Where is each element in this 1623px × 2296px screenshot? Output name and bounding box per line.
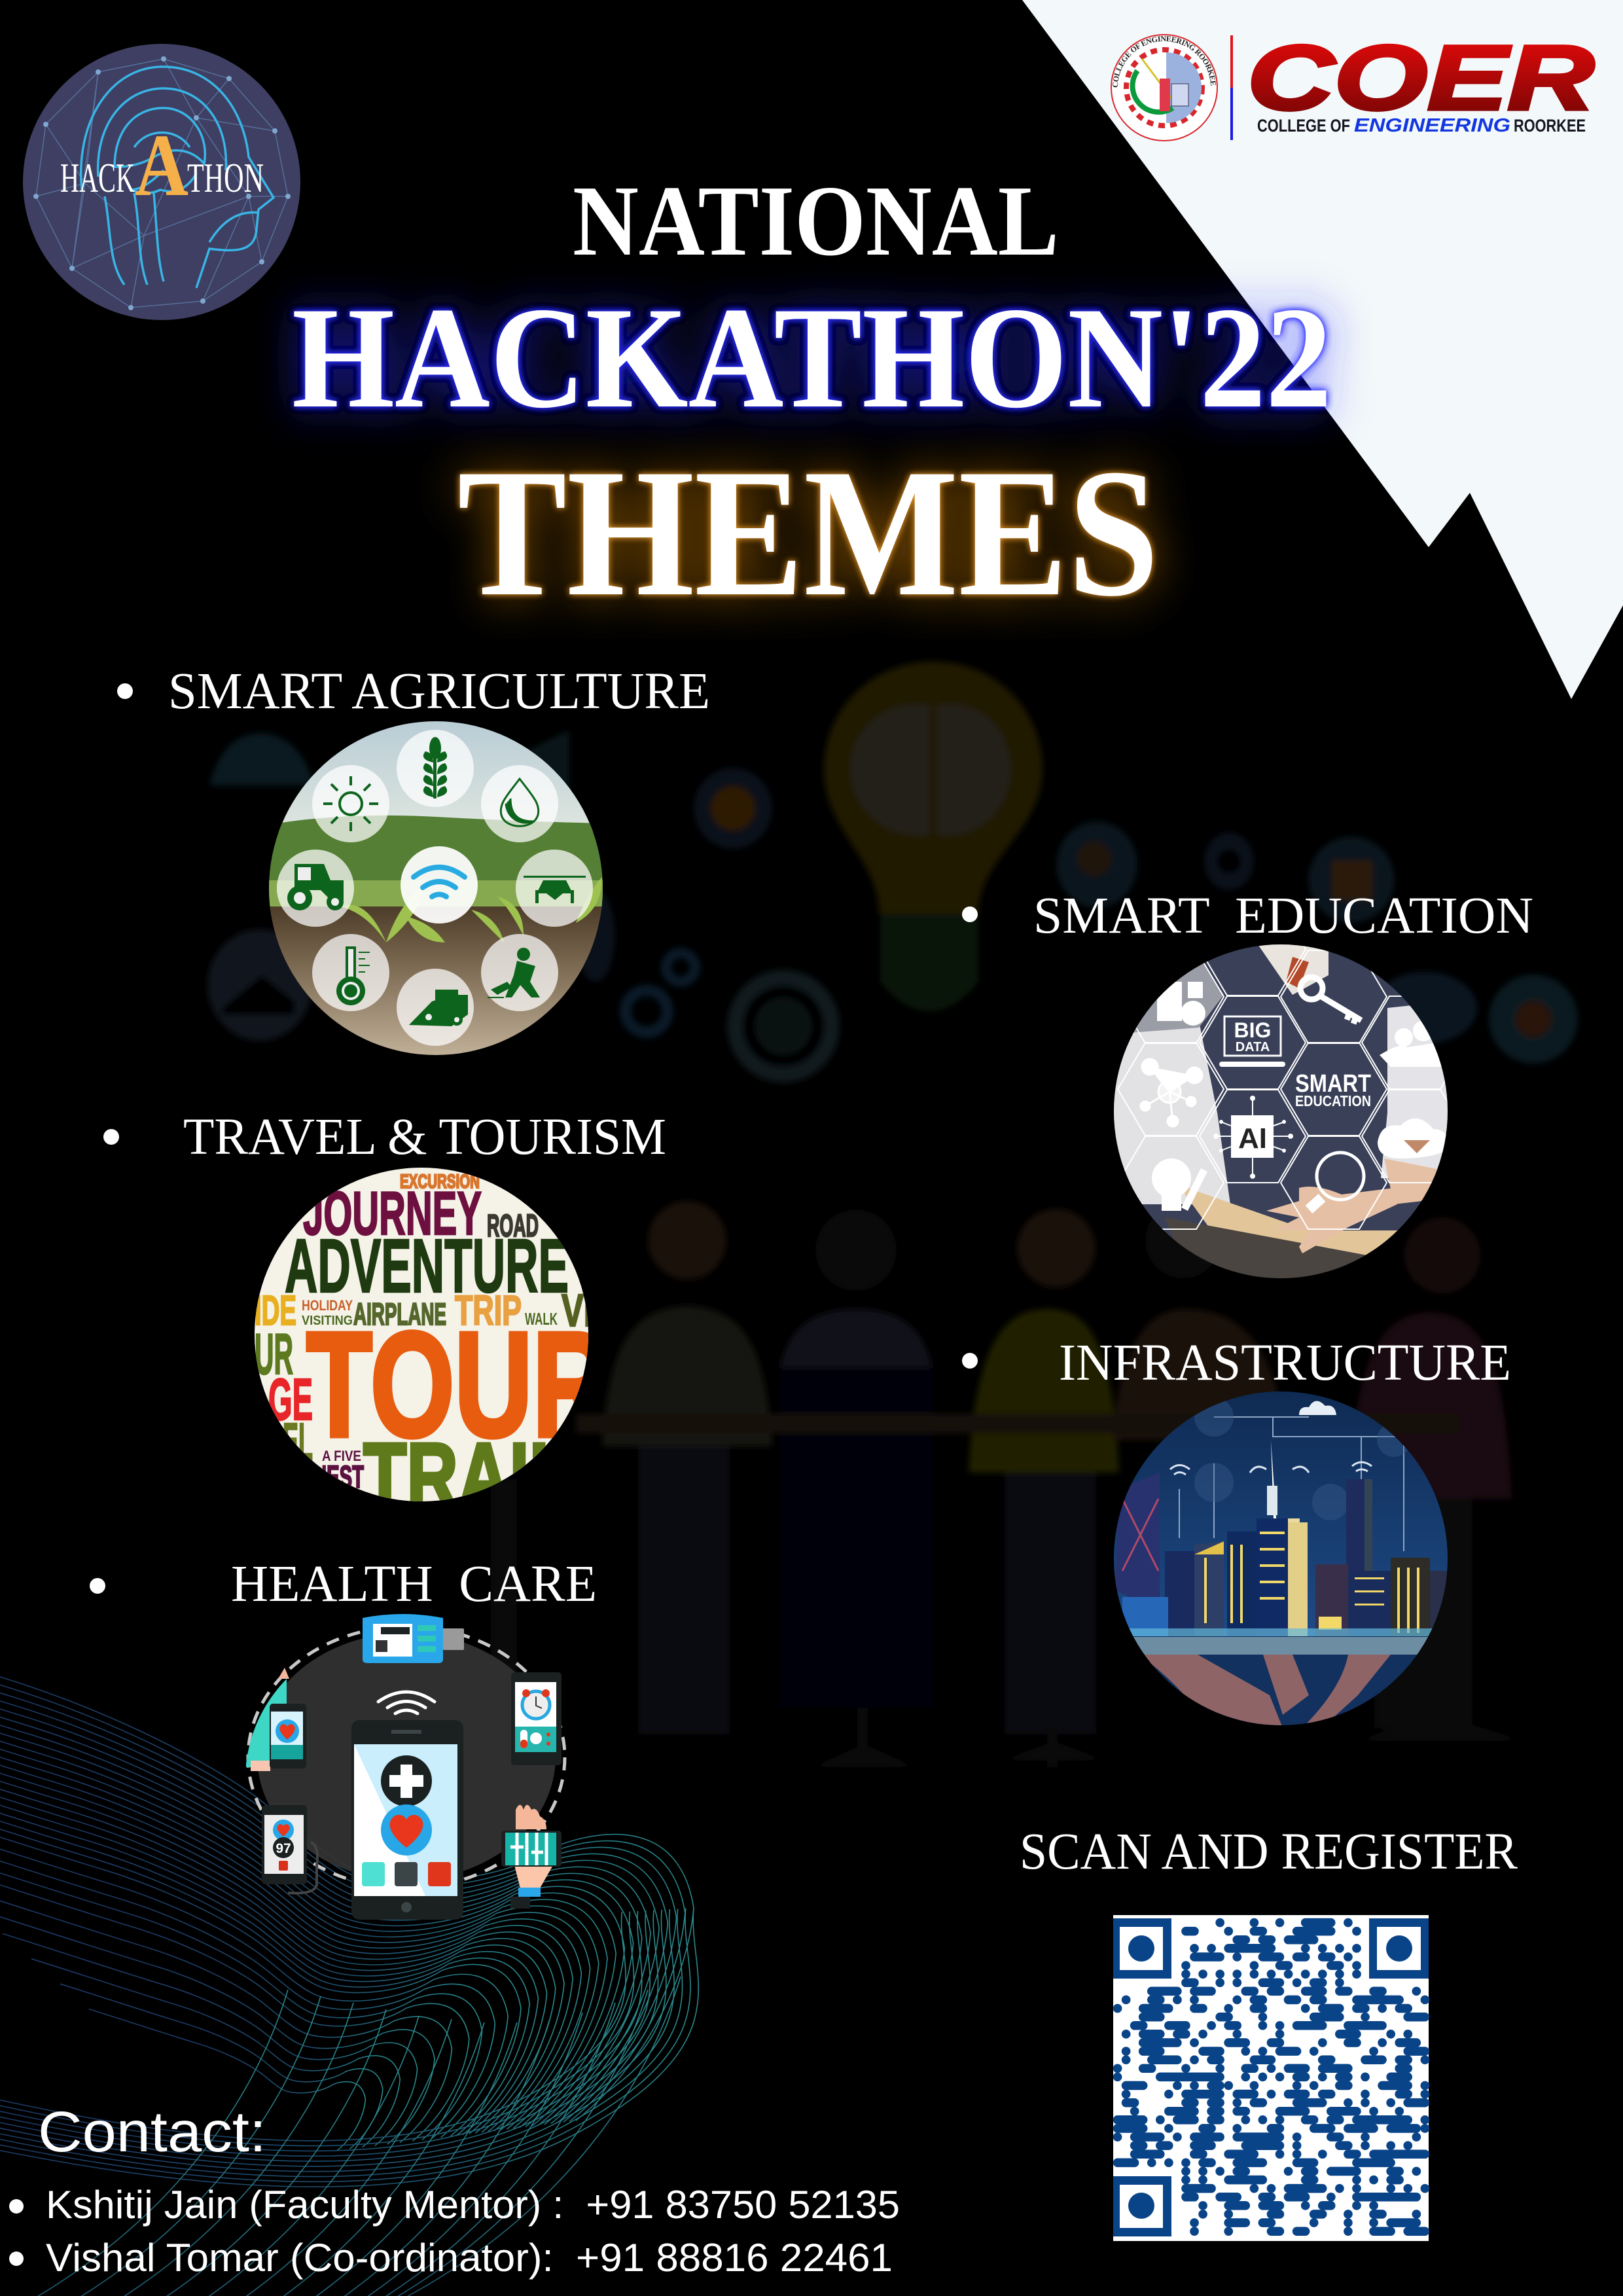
icon: hand with wrist sensor xyxy=(501,1805,562,1909)
logo text: A xyxy=(135,117,188,215)
panel: travel and tourism word cloud: TOUR xyxy=(306,1302,611,1468)
label: smart education xyxy=(1295,1070,1371,1109)
icon: big data laptop xyxy=(1219,1016,1285,1067)
logo text: HACK xyxy=(60,154,135,201)
panel: travel and tourism word cloud: HOLIDAY xyxy=(302,1297,353,1314)
icon: light bulb xyxy=(824,662,1043,1011)
COER subtitle xyxy=(1257,115,1586,136)
panel: travel and tourism word cloud xyxy=(249,1165,611,1529)
heading: smart education: SMART EDUCATION xyxy=(1033,888,1533,944)
panel: travel and tourism word cloud: UR xyxy=(255,1321,293,1386)
panel: travel and tourism word cloud: TRAIL xyxy=(363,1424,573,1529)
heading: infrastructure: INFRASTRUCTURE xyxy=(1059,1335,1511,1391)
icon: people xyxy=(1380,1020,1450,1067)
logo: hackathon brain circle xyxy=(23,44,300,320)
icon: network nodes xyxy=(1141,1059,1202,1126)
icon: head and brain xyxy=(81,67,274,288)
panel: travel and tourism word cloud: AIRPLANE xyxy=(353,1297,446,1331)
COER subtitle: ROORKEE xyxy=(1514,116,1586,135)
panel: travel and tourism word cloud: WALK xyxy=(525,1309,558,1329)
icon: wifi xyxy=(414,867,465,897)
icon: magnifier xyxy=(1309,1153,1364,1210)
title: NATIONAL: NATIONAL xyxy=(573,166,1059,277)
heading: scan and register: SCAN AND REGISTER xyxy=(1020,1823,1518,1880)
icon bubbles xyxy=(277,730,593,1046)
panel: travel and tourism word cloud: ROAD xyxy=(487,1209,539,1244)
hexagon grid xyxy=(1118,903,1468,1229)
icon: water drop xyxy=(501,779,539,826)
panel: smart agriculture image xyxy=(262,721,609,1057)
cloud icon xyxy=(1299,1401,1336,1415)
logo text: THON xyxy=(187,154,264,201)
panel: travel and tourism word cloud: IDE xyxy=(255,1287,296,1334)
label: smart education: EDUCATION xyxy=(1295,1092,1371,1109)
title: THEMES: THEMES xyxy=(457,431,1159,634)
icon: oximeter phone xyxy=(262,1805,317,1893)
icons: faded technology icons xyxy=(207,730,1578,1083)
panel: travel and tourism word cloud: EXCURSION xyxy=(400,1171,480,1193)
icon: alarm and pill phone xyxy=(511,1672,562,1765)
QR code xyxy=(1113,1915,1429,2241)
panel: travel and tourism word cloud: VI xyxy=(562,1285,593,1336)
heading: smart agriculture: SMART AGRICULTURE xyxy=(168,663,710,720)
heading: health care: HEALTH CARE xyxy=(231,1556,597,1613)
white torn corner shape xyxy=(1022,0,1623,699)
icon: big data laptop: BIG xyxy=(1234,1018,1271,1042)
contact: Vishal Tomar: Vishal Tomar (Co-ordinator): +91 88816 22461 xyxy=(46,2236,893,2280)
contact: Kshitij Jain: Kshitij Jain (Faculty Mentor) : +91 83750 52135 xyxy=(46,2183,900,2227)
icon: tractor xyxy=(287,864,344,910)
city lights xyxy=(1204,1532,1419,1633)
icon: wheat xyxy=(423,737,447,798)
panel: travel and tourism word cloud: EL xyxy=(283,1412,313,1471)
panel: travel and tourism word cloud: GE xyxy=(268,1367,313,1433)
icon: heart rate phone and building xyxy=(246,1668,306,1771)
icon: idea bulb and pencil xyxy=(1152,1158,1207,1211)
connection lines xyxy=(1179,1417,1407,1551)
QR data modules xyxy=(1118,1923,1425,2231)
panel: travel and tourism word cloud: JOURNEY xyxy=(303,1179,482,1247)
panel: travel and tourism word cloud: TRIP xyxy=(455,1287,522,1334)
panel: health care illustration xyxy=(246,1614,565,1920)
panel: travel and tourism word cloud: VISITING xyxy=(302,1314,353,1328)
panel: travel and tourism word cloud: NEST xyxy=(313,1460,364,1495)
emblem: COLLEGE OF ENGINEERING ROORKEE xyxy=(1113,36,1216,88)
icon: oximeter phone: 97 xyxy=(276,1841,291,1856)
logo text xyxy=(60,117,264,215)
finder pattern: top left xyxy=(1113,1918,1171,1979)
icon: buildings and cursor xyxy=(1157,982,1205,1026)
hands xyxy=(1139,1655,1391,1728)
skyline xyxy=(1115,1440,1453,1636)
illustration: team of people around a table xyxy=(491,1201,1525,1767)
icon: AI chip xyxy=(1213,1096,1293,1179)
icon: main smartphone xyxy=(351,1720,463,1920)
network circles xyxy=(1194,1397,1411,1520)
icon: usb monitor device xyxy=(363,1614,464,1663)
faded background illustration: light bulb, icons and team xyxy=(207,662,1578,1767)
title: HACKATHON'22: HACKATHON'22 xyxy=(292,278,1332,439)
icon: key xyxy=(1300,977,1361,1024)
label: smart education: SMART xyxy=(1295,1070,1371,1098)
icon: farmer with shovel xyxy=(488,948,540,997)
finder pattern: top right xyxy=(1369,1918,1429,1979)
tablet edge xyxy=(1113,1637,1450,1655)
icon: AI chip: AI xyxy=(1238,1122,1267,1155)
icon: drone xyxy=(524,876,586,903)
COER subtitle: ENGINEERING xyxy=(1354,115,1510,136)
contact heading: Contact: xyxy=(38,2100,266,2164)
icon: sun xyxy=(323,776,378,831)
icon: harvester xyxy=(409,990,468,1026)
panel: smart education image xyxy=(1113,903,1468,1283)
icon: wifi signal xyxy=(378,1692,435,1713)
wave mesh decoration xyxy=(0,1532,698,2296)
COER subtitle: COLLEGE OF xyxy=(1257,116,1350,135)
panel: travel and tourism word cloud: A FIVE xyxy=(322,1448,361,1464)
finder pattern: bottom left xyxy=(1113,2176,1171,2236)
panel: travel and tourism word cloud: ADVENTURE xyxy=(285,1223,569,1308)
icon: thermometer xyxy=(336,946,370,1005)
emblem xyxy=(1111,34,1218,141)
logo: COER college xyxy=(1111,26,1596,141)
COER wordmark: COER xyxy=(1247,26,1594,129)
panel: infrastructure smart city image xyxy=(1113,1388,1453,1728)
icon: cloud download xyxy=(1378,1119,1450,1158)
wifi signals xyxy=(1170,1462,1372,1475)
heading: travel and tourism: TRAVEL & TOURISM xyxy=(183,1109,666,1166)
icon: big data laptop: DATA xyxy=(1236,1040,1270,1054)
